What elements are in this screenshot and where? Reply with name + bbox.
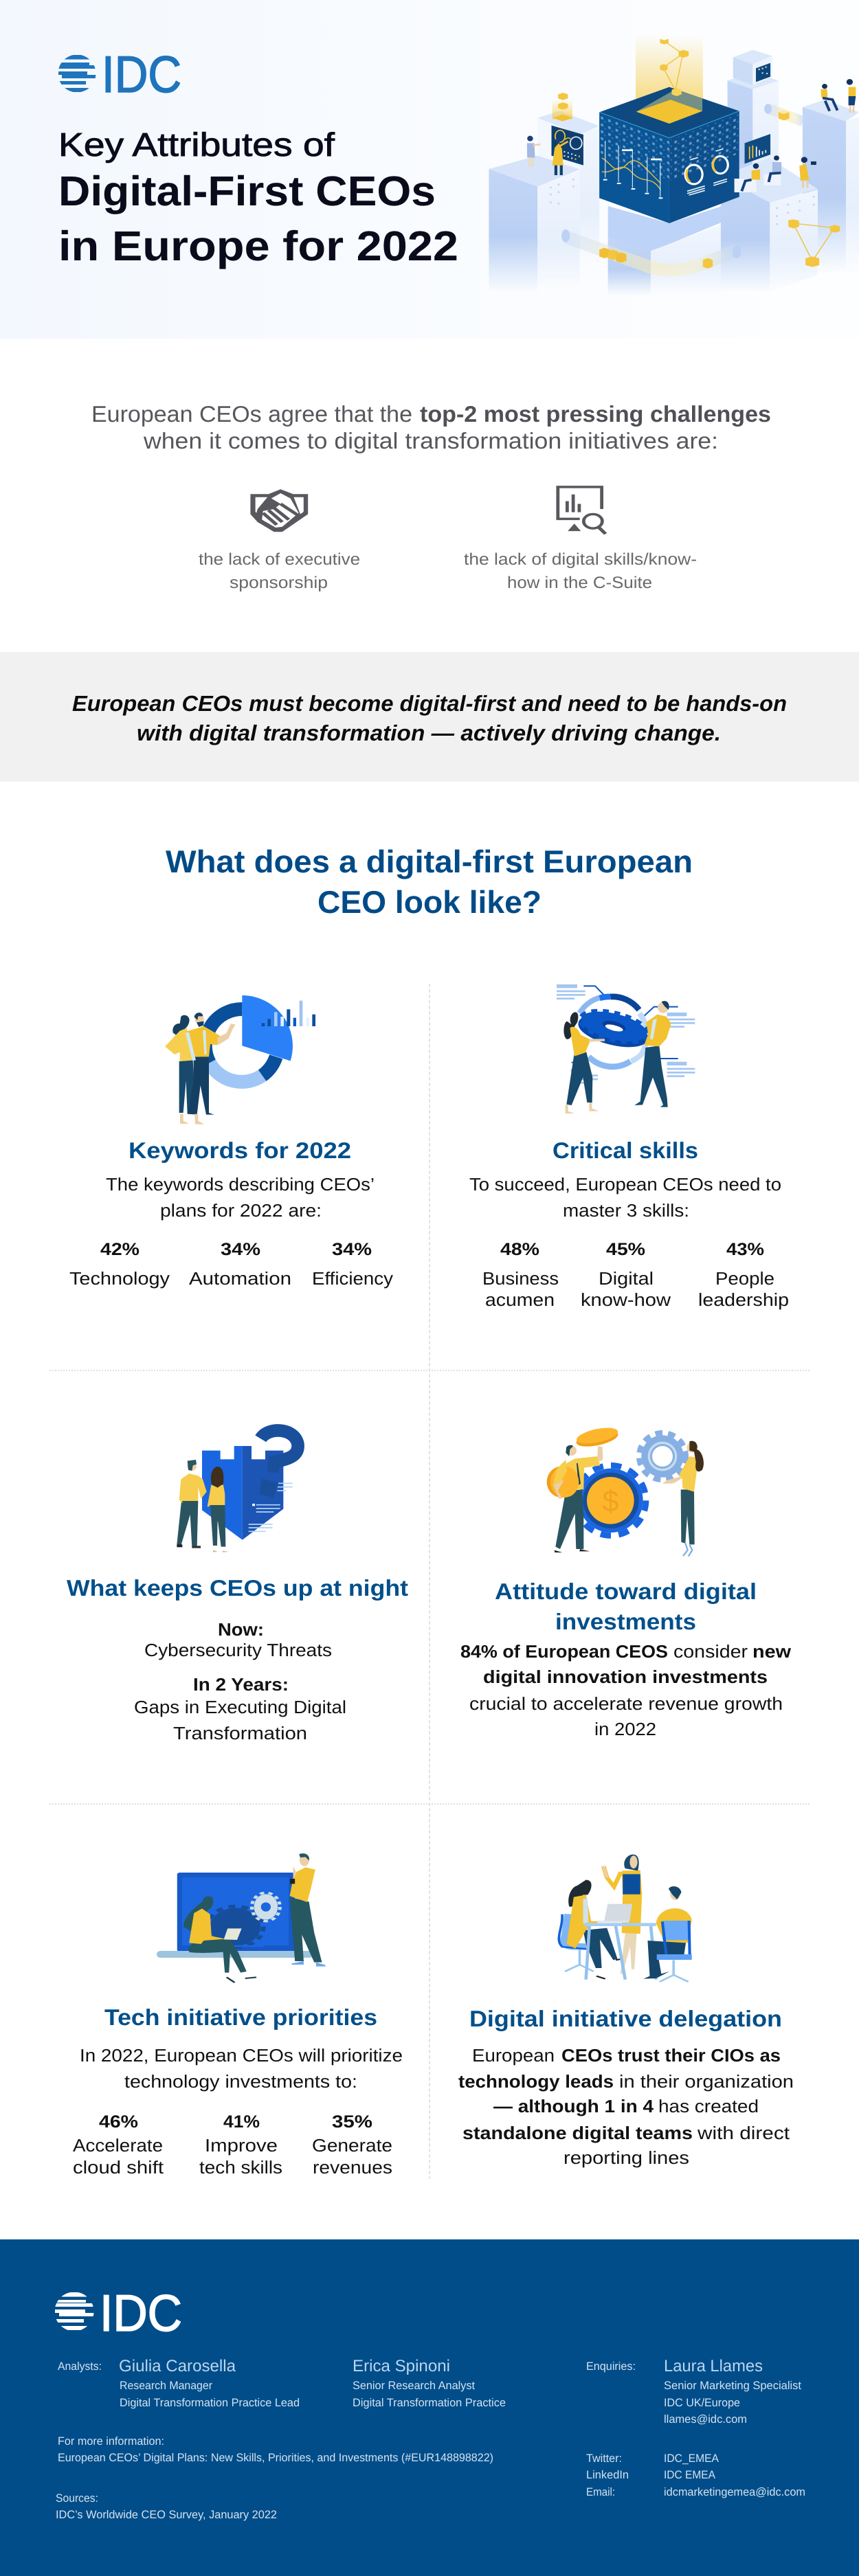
description <box>458 2045 794 2168</box>
description: tech initiative priorities: In 2022, European CEOs will prioritize <box>80 2045 403 2066</box>
analysts <box>58 2357 506 2409</box>
stats: skills: know-how <box>581 1289 671 1310</box>
now / in 2 years text: Cybersecurity Threats <box>144 1640 332 1660</box>
description: reporting lines <box>564 2147 689 2168</box>
stats: skills: 48% <box>500 1240 539 1259</box>
description: consider <box>673 1641 748 1662</box>
heading <box>495 1579 757 1634</box>
panel: attitude toward digital investments <box>460 1425 792 1739</box>
enquiries: IDC UK/Europe <box>664 2397 740 2409</box>
analysts: Analysts: <box>58 2360 102 2373</box>
people on platforms <box>527 79 856 192</box>
section heading <box>166 844 693 920</box>
social contacts: Twitter: <box>586 2452 622 2465</box>
enquiries <box>586 2357 801 2426</box>
stats: tech priorities: Generate <box>312 2135 392 2156</box>
description: in their organization <box>619 2071 794 2092</box>
lower left tower <box>489 156 580 293</box>
label: lack of executive sponsorship <box>199 550 360 592</box>
more information: For more information: <box>58 2435 164 2448</box>
title: Key Attributes of <box>58 127 335 163</box>
label: lack of digital skills <box>464 550 697 592</box>
social contacts: IDC EMEA <box>664 2469 715 2481</box>
description: The keywords describing CEOs’ <box>106 1174 375 1195</box>
analysts: Research Manager <box>120 2380 212 2392</box>
analysts: Giulia Carosella <box>119 2357 236 2375</box>
footer IDC logo <box>55 2292 181 2331</box>
description <box>460 1641 792 1739</box>
stats: tech priorities: 35% <box>332 2112 372 2132</box>
stats: tech priorities: revenues <box>313 2157 392 2178</box>
social contacts: idcmarketingemea@idc.com <box>664 2486 805 2498</box>
description: — although 1 in 4 <box>493 2096 654 2116</box>
description: CEOs trust their CIOs as <box>561 2045 781 2066</box>
panel: what keeps CEOs up at night <box>67 1430 408 1743</box>
heading: investments <box>555 1609 696 1634</box>
more information: European CEOs’ Digital Plans: New Skills, Priorities, and Investments (#EUR148898822) <box>58 2452 493 2464</box>
intro text: European CEOs agree that the <box>91 401 412 427</box>
upper pipe with cube <box>764 104 803 122</box>
description: crucial to accelerate revenue growth <box>469 1693 783 1714</box>
stats: skills: acumen <box>485 1289 555 1310</box>
panel: digital initiative delegation <box>458 1855 794 2168</box>
panel: tech initiative priorities <box>157 1853 326 1982</box>
icon: chart with magnifier <box>558 487 605 534</box>
sources: Sources: <box>56 2492 98 2505</box>
stats: skills <box>482 1240 789 1310</box>
small wall screen <box>745 134 770 163</box>
callout band <box>0 652 859 782</box>
enquiries: Senior Marketing Specialist <box>664 2380 801 2392</box>
description: digital innovation investments <box>483 1667 768 1687</box>
cube ring gauges <box>685 165 702 184</box>
description: European <box>472 2045 555 2066</box>
IDC logo: IDC <box>102 45 181 103</box>
top node graph <box>660 39 689 96</box>
description: To succeed, European CEOs need to <box>469 1174 781 1195</box>
enquiries: Laura Llames <box>664 2357 763 2375</box>
stats: keywords: 34% <box>332 1240 372 1259</box>
description <box>106 1174 375 1221</box>
stats: skills: People <box>715 1268 774 1289</box>
now / in 2 years text: In 2 Years: <box>193 1674 289 1695</box>
sources: IDC’s Worldwide CEO Survey, January 2022 <box>56 2509 277 2521</box>
hero illustration: isometric data cube <box>489 34 859 295</box>
analysts: Digital Transformation Practice <box>353 2397 506 2409</box>
description: new <box>752 1641 792 1662</box>
stats: skills: Digital <box>599 1268 654 1289</box>
stats: skills: 43% <box>726 1240 764 1259</box>
illustration: people lifting gear <box>557 984 695 1114</box>
now / in 2 years text <box>134 1619 346 1743</box>
description: master 3 skills: <box>563 1200 689 1221</box>
panel: critical skills <box>469 984 789 1310</box>
stats: tech priorities: 46% <box>99 2112 138 2132</box>
illustration: shield and question mark <box>177 1430 298 1552</box>
now / in 2 years text: Gaps in Executing Digital <box>134 1697 346 1717</box>
stats: skills: 45% <box>606 1240 645 1259</box>
label: lack of executive sponsorship: the lack of executive <box>199 550 360 569</box>
enquiries: llames@idc.com <box>664 2413 747 2426</box>
illustration: people with donut chart <box>165 995 315 1125</box>
now / in 2 years text: Now: <box>218 1619 264 1640</box>
icon: handshake <box>250 489 308 532</box>
heading: Digital initiative delegation <box>469 2006 782 2031</box>
footer IDC logo: IDC <box>100 2284 182 2342</box>
stats: keywords: 42% <box>100 1240 140 1259</box>
section heading: CEO look like? <box>317 884 542 920</box>
description: in 2022 <box>594 1719 656 1739</box>
label: lack of executive sponsorship: sponsorship <box>230 574 328 592</box>
stats: skills: leadership <box>698 1289 789 1310</box>
heading: Attitude toward digital <box>495 1579 757 1604</box>
description <box>469 1174 781 1221</box>
stats: tech priorities: tech skills <box>199 2157 282 2178</box>
now / in 2 years text: Transformation <box>173 1723 307 1743</box>
stats: keywords: Efficiency <box>312 1268 393 1289</box>
section heading: What does a digital-first European <box>166 844 693 879</box>
footer panel <box>0 2239 859 2576</box>
illustration: team around a table <box>559 1855 692 1982</box>
callout band: with digital transformation — actively driving change. <box>137 721 721 745</box>
label: lack of digital skills: the lack of digital skills/know- <box>464 550 697 569</box>
heading: Keywords for 2022 <box>129 1138 351 1163</box>
description: plans for 2022 are: <box>160 1200 322 1221</box>
description: standalone digital teams <box>462 2123 693 2143</box>
title: in Europe for 2022 <box>58 223 458 269</box>
social contacts <box>586 2452 805 2498</box>
back tall tower <box>728 50 779 227</box>
label: lack of digital skills: how in the C-Suite <box>507 574 652 592</box>
cube wave chart <box>602 141 660 197</box>
illustration: laptop and people <box>157 1853 326 1982</box>
base block under cube <box>608 206 722 295</box>
description: tech initiative priorities: technology investments to: <box>124 2071 357 2092</box>
back right tower <box>803 100 859 273</box>
stats: tech priorities: Accelerate <box>73 2135 163 2156</box>
stats: tech priorities: Improve <box>205 2135 278 2156</box>
stats: tech priorities: 41% <box>223 2112 260 2132</box>
analysts: Erica Spinoni <box>353 2357 450 2375</box>
social contacts: LinkedIn <box>586 2469 629 2481</box>
description: has created <box>658 2096 759 2116</box>
description: 84% of European CEOS <box>460 1641 668 1662</box>
triangle node graph <box>788 219 840 267</box>
description: tech initiative priorities <box>80 2045 403 2092</box>
bottom pipe with cubes <box>561 229 741 270</box>
stats: tech priorities <box>73 2112 392 2178</box>
social contacts: Email: <box>586 2486 615 2498</box>
mid right tower <box>721 158 818 292</box>
sources <box>56 2492 277 2521</box>
enquiries: Enquiries: <box>586 2360 636 2373</box>
illustration: gears and coins <box>547 1425 704 1557</box>
description: with direct <box>697 2123 790 2143</box>
stats: skills: Business <box>482 1268 559 1289</box>
heading: What keeps CEOs up at night <box>67 1575 408 1601</box>
title <box>58 127 458 269</box>
analysts: Digital Transformation Practice Lead <box>120 2397 300 2409</box>
IDC logo <box>58 55 180 93</box>
header panel <box>0 0 859 339</box>
left back block with panel <box>537 93 599 270</box>
heading: Critical skills <box>553 1138 698 1163</box>
social contacts: IDC_EMEA <box>664 2452 719 2465</box>
stats: keywords: 34% <box>221 1240 260 1259</box>
intro text: when it comes to digital transformation initiatives are: <box>143 428 718 453</box>
illustration: gears and coins: $ <box>602 1484 618 1517</box>
callout band: European CEOs must become digital-first and need to be hands-on <box>72 691 787 716</box>
data cube <box>599 34 739 223</box>
title: Digital-First CEOs <box>58 168 436 214</box>
intro text <box>91 401 771 453</box>
stats: keywords: Automation <box>189 1268 291 1289</box>
heading: tech initiative priorities: Tech initiative priorities <box>104 2004 377 2030</box>
stats: keywords: Technology <box>69 1268 170 1289</box>
stats: keywords <box>69 1240 393 1289</box>
more information <box>58 2435 493 2464</box>
panel: keywords for 2022 <box>69 995 393 1289</box>
analysts: Senior Research Analyst <box>353 2380 475 2392</box>
description: technology leads <box>458 2071 614 2092</box>
stats: tech priorities: cloud shift <box>73 2157 164 2178</box>
intro text: top-2 most pressing challenges <box>420 401 771 427</box>
